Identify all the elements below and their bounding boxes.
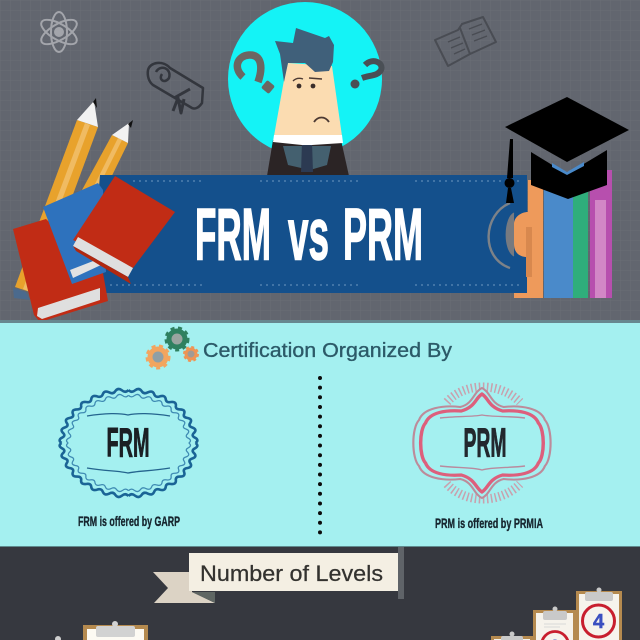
banner	[90, 175, 527, 293]
graduation cap	[504, 97, 629, 203]
heading: certification organized by: Certification Organized By	[203, 340, 452, 362]
ribbon heading: number of levels	[153, 553, 398, 603]
panel: number of levels	[0, 547, 640, 640]
blue book	[43, 183, 106, 284]
hair	[275, 28, 334, 82]
clipboard: level 1 peek	[55, 636, 61, 640]
icon: diploma scroll	[148, 63, 203, 113]
tie	[301, 142, 313, 172]
clipboard: PRM level 3	[533, 606, 576, 640]
illustration: confused man	[228, 2, 382, 176]
red book back	[13, 219, 108, 322]
collar	[273, 135, 343, 145]
cyan circle	[228, 2, 382, 156]
panel: hero background	[0, 0, 640, 322]
blue book	[544, 180, 573, 298]
title: vs	[288, 194, 329, 276]
clipboard: FRM	[83, 621, 148, 640]
book stack: right	[504, 97, 629, 298]
banner notch	[506, 213, 514, 256]
badge: FRM: FRM	[106, 420, 150, 466]
left question mark	[237, 55, 275, 94]
badge: PRM: PRM	[464, 420, 506, 466]
clipboard: PRM level 4: 4	[593, 611, 605, 633]
clipboard: PRM level 2	[491, 632, 533, 640]
green book	[573, 180, 588, 298]
title	[195, 194, 423, 276]
title: FRM	[195, 194, 271, 276]
face details	[293, 78, 329, 122]
banner: PRM	[343, 194, 423, 276]
right question mark	[350, 61, 382, 88]
vest	[283, 146, 331, 170]
pencil 1	[15, 98, 98, 294]
banner stitching	[110, 181, 520, 285]
icon: open book	[435, 17, 496, 66]
ribbon heading: number of levels: Number of Levels	[200, 561, 383, 586]
face	[274, 63, 342, 136]
red book front	[73, 176, 175, 284]
pencil shadow	[13, 288, 30, 300]
book stack: left	[13, 176, 175, 322]
icon: gears	[147, 328, 198, 368]
rays	[447, 387, 520, 499]
clipboard: PRM level 4	[576, 588, 622, 640]
pencils	[13, 98, 133, 300]
purple book	[590, 170, 612, 298]
purple book label	[595, 200, 606, 298]
panel: certification organized by	[0, 320, 640, 547]
badge: PRM	[413, 387, 551, 499]
banner arc	[489, 203, 510, 268]
caption: FRM: FRM is offered by GARP	[78, 513, 180, 529]
caption: PRM: PRM is offered by PRMIA	[435, 515, 543, 531]
orange book	[514, 180, 543, 298]
badge: FRM	[60, 389, 197, 497]
jacket	[267, 140, 349, 176]
dotted divider	[318, 378, 322, 533]
icon: atom	[38, 12, 80, 52]
pencil 2	[82, 120, 133, 200]
orange book spine	[526, 227, 532, 277]
